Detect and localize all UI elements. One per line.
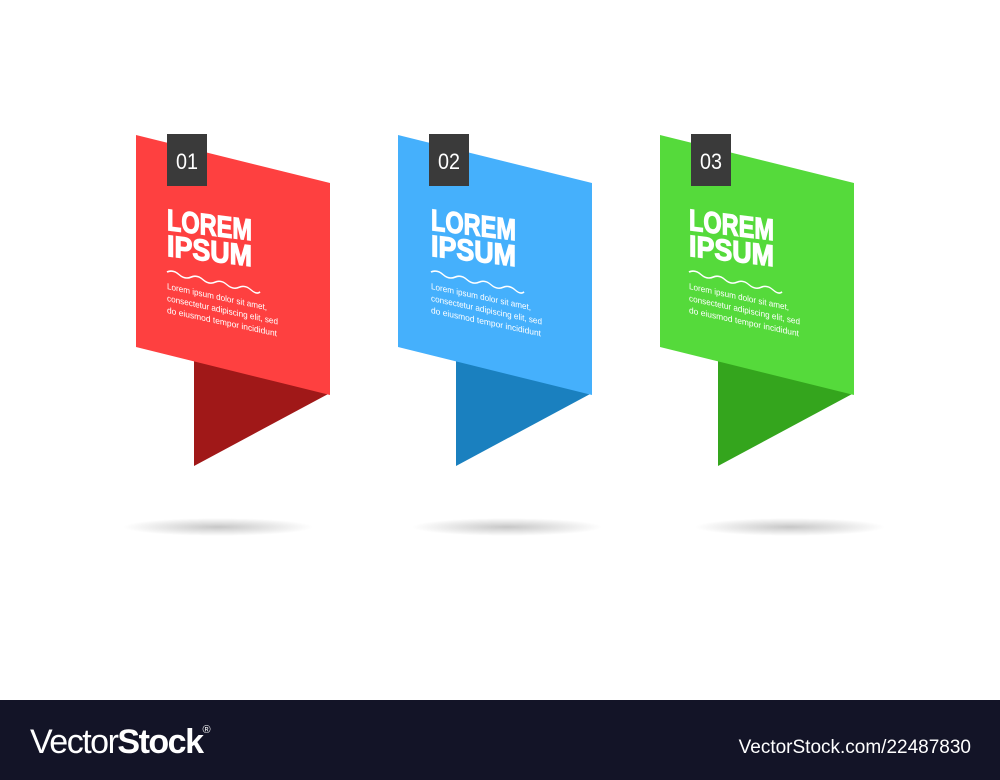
number badge (691, 134, 731, 186)
body text: Lorem ipsum dolor sit amet, (167, 281, 267, 312)
headline: IPSUM (689, 230, 774, 273)
panel: 03 green (660, 134, 854, 466)
headline (689, 204, 774, 273)
headline (431, 204, 516, 273)
body text: do eiusmod tempor incididunt (167, 305, 278, 338)
footer logo: VectorStock (30, 723, 202, 761)
flap (718, 350, 854, 466)
footer bar (0, 700, 1000, 780)
flap (194, 350, 330, 466)
headline: IPSUM (431, 230, 516, 273)
number badge (429, 134, 469, 186)
number badge (167, 134, 207, 186)
shadow 1 (123, 518, 313, 536)
footer logo: ® (202, 724, 210, 736)
headline: LOREM (167, 204, 252, 247)
body text: consectetur adipiscing elit, sed (689, 293, 800, 327)
number badge: 03 (700, 149, 722, 174)
body text: consectetur adipiscing elit, sed (167, 293, 278, 327)
body text: do eiusmod tempor incididunt (689, 305, 800, 338)
headline (167, 204, 252, 273)
panel: 02 blue (398, 134, 592, 466)
headline: IPSUM (167, 230, 252, 273)
body text: do eiusmod tempor incididunt (431, 305, 542, 338)
panel: 01 red (136, 134, 330, 466)
number badge: 01 (176, 149, 198, 174)
body text (431, 270, 542, 339)
front face (136, 135, 330, 395)
headline: LOREM (431, 204, 516, 247)
shadow 2 (412, 518, 602, 536)
flap (456, 350, 592, 466)
number badge: 02 (438, 149, 460, 174)
body text (689, 270, 800, 339)
shadow 3 (695, 518, 885, 536)
body text (167, 270, 278, 339)
headline: LOREM (689, 204, 774, 247)
front face (660, 135, 854, 395)
front face (398, 135, 592, 395)
body text: Lorem ipsum dolor sit amet, (431, 281, 531, 312)
body text: consectetur adipiscing elit, sed (431, 293, 542, 327)
body text: Lorem ipsum dolor sit amet, (689, 281, 789, 312)
footer url: VectorStock.com/22487830 (739, 737, 971, 758)
